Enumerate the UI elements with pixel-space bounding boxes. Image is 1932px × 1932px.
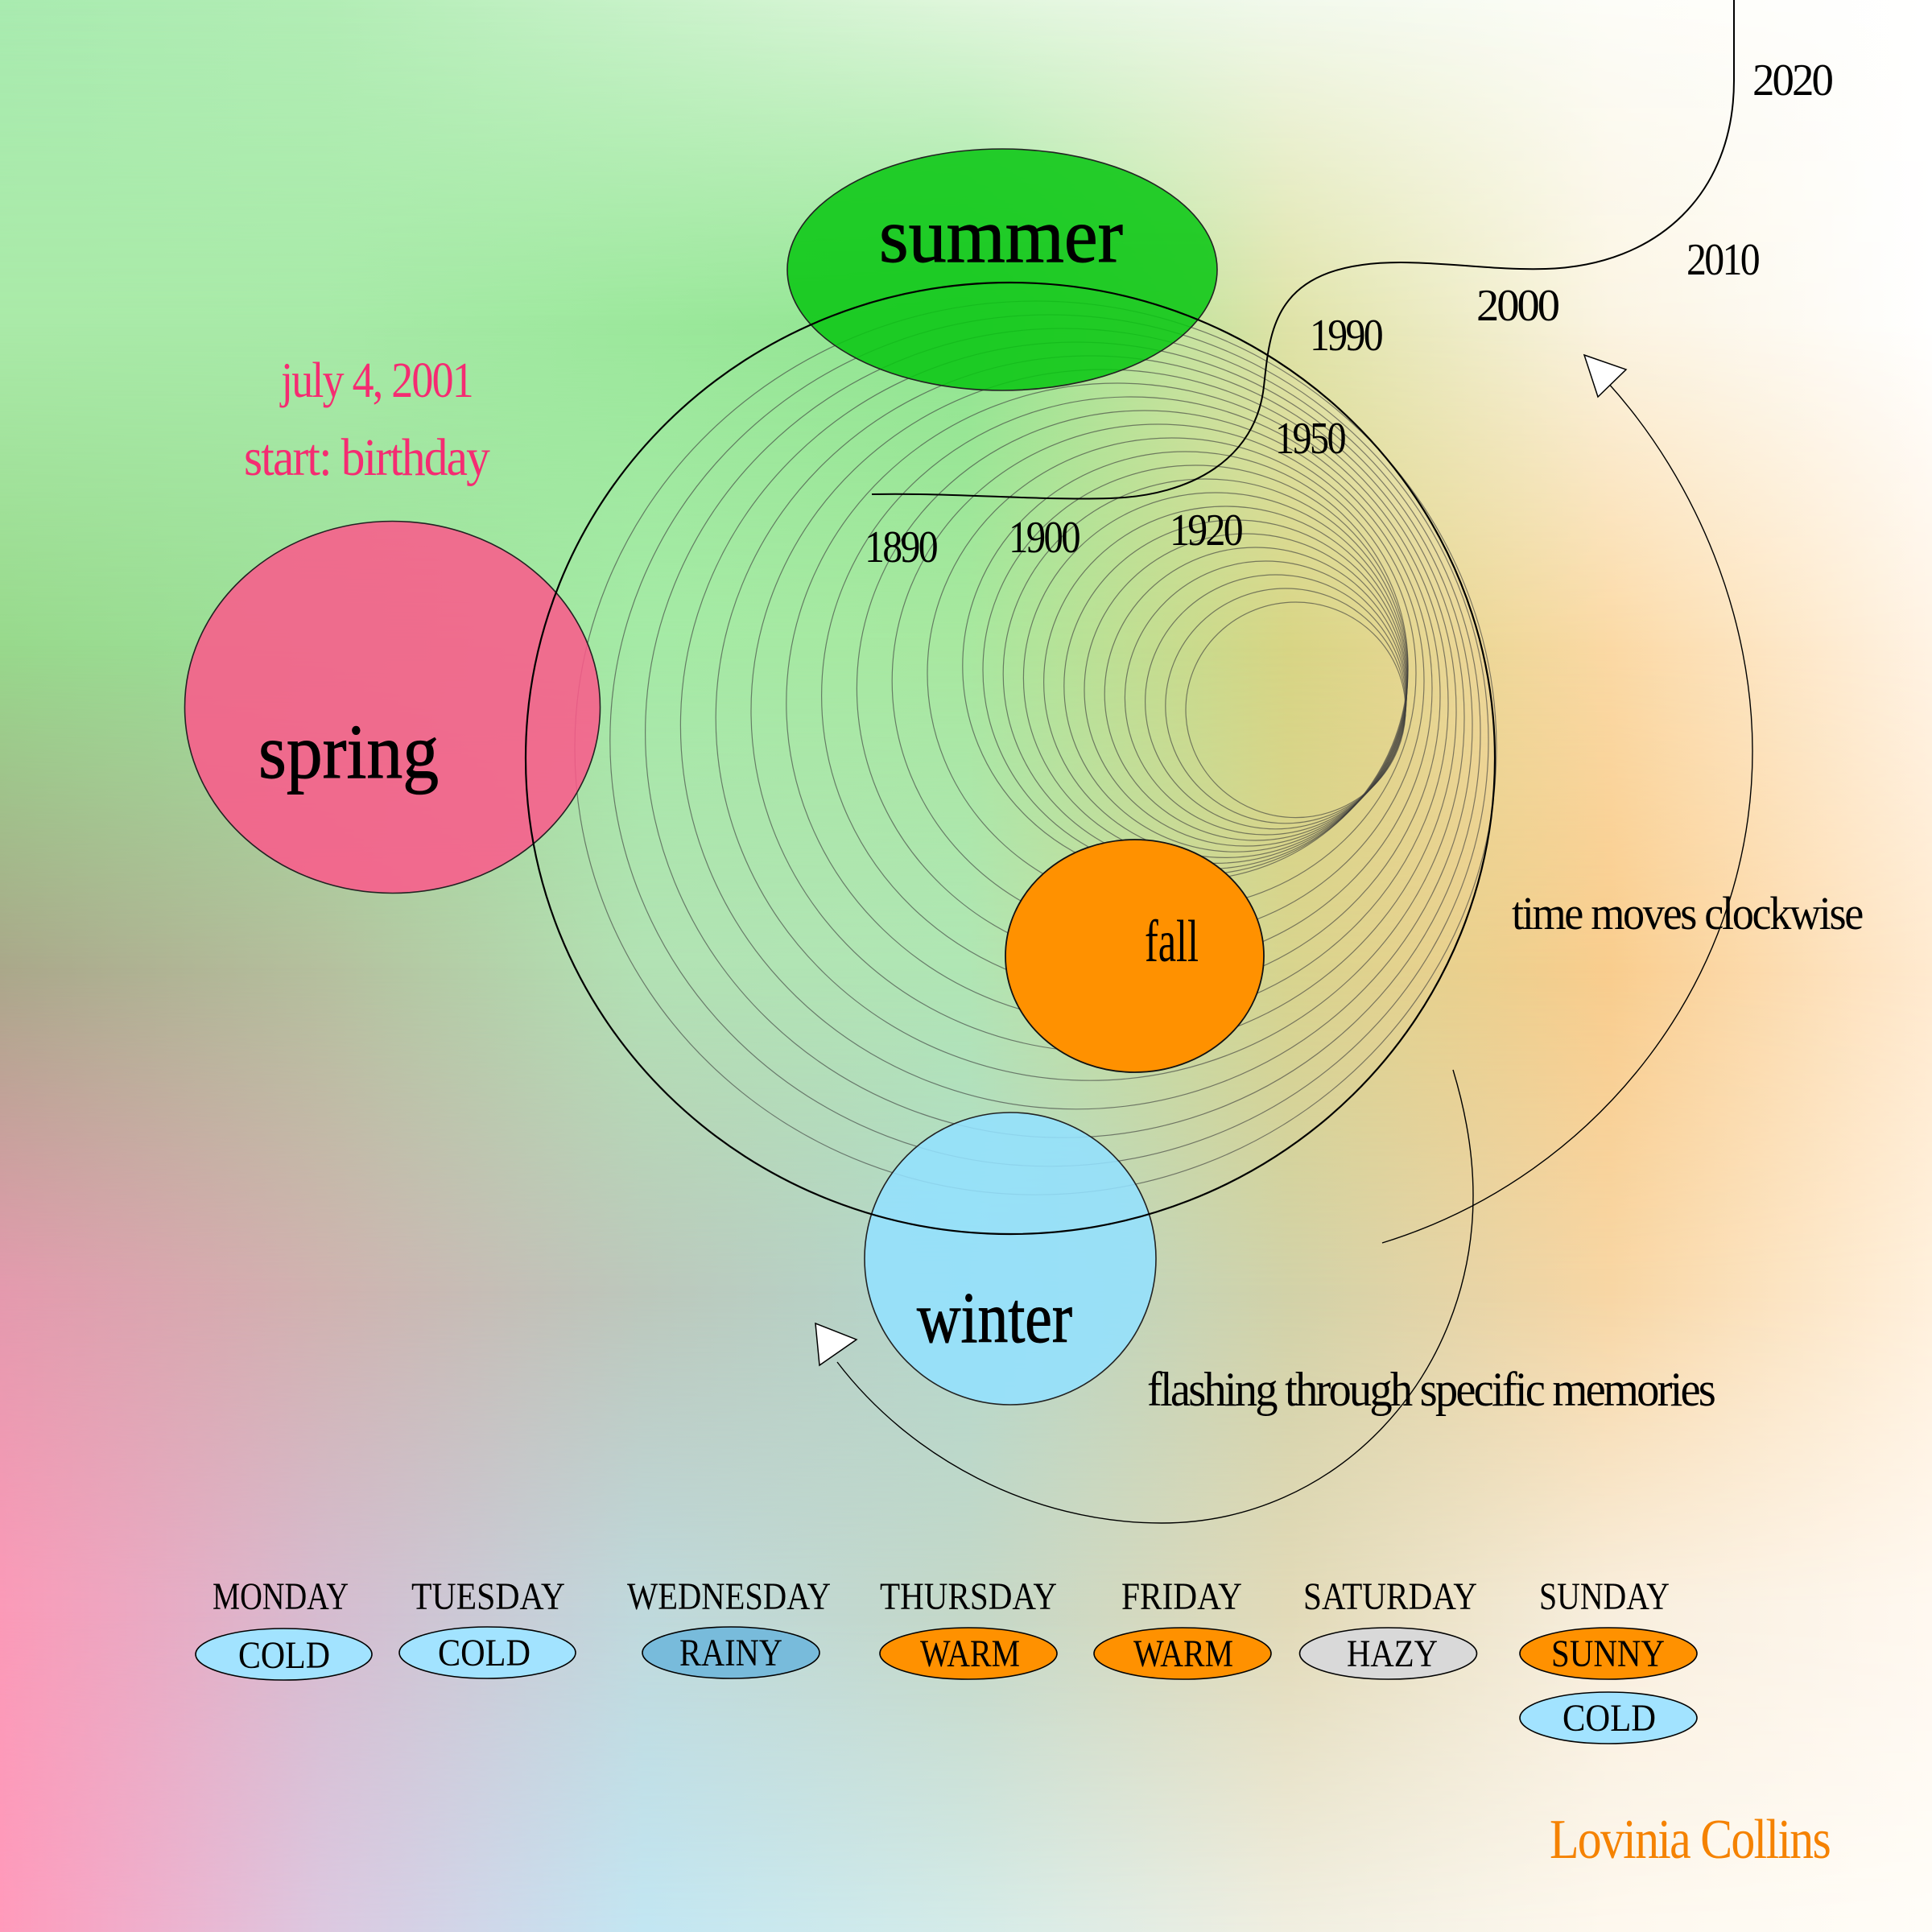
weekday headings: SUNDAY bbox=[1539, 1575, 1670, 1618]
year labels: 1990 bbox=[1310, 311, 1382, 361]
year labels bbox=[865, 56, 1832, 572]
year labels: 2010 bbox=[1686, 235, 1759, 285]
pill: Friday warm: WARM bbox=[1133, 1633, 1233, 1675]
weekday headings: WEDNESDAY bbox=[627, 1575, 831, 1618]
nested rings: years of life bbox=[575, 301, 1496, 1195]
season ellipse: summer bbox=[787, 149, 1217, 390]
year labels: 2000 bbox=[1476, 281, 1558, 331]
label: winter: winter bbox=[917, 1278, 1072, 1358]
label: summer: summer bbox=[879, 192, 1123, 279]
weekday headings bbox=[213, 1575, 1670, 1618]
pill: Friday warm bbox=[1094, 1628, 1271, 1679]
year labels: 1890 bbox=[865, 522, 937, 572]
year labels: 1900 bbox=[1009, 513, 1080, 563]
pill: Wednesday rainy: RAINY bbox=[679, 1632, 782, 1674]
pill: Wednesday rainy bbox=[642, 1627, 819, 1678]
pill: Tuesday cold: COLD bbox=[438, 1632, 530, 1674]
pill: Tuesday cold bbox=[399, 1627, 576, 1678]
pill: Monday cold: COLD bbox=[238, 1634, 330, 1677]
annotation: time moves clockwise: time moves clockwise bbox=[1512, 887, 1863, 939]
pill: Monday cold bbox=[196, 1629, 372, 1680]
arrow: time moves clockwise bbox=[1382, 355, 1752, 1243]
year labels: 2020 bbox=[1752, 56, 1832, 105]
year labels: 1950 bbox=[1275, 414, 1345, 464]
weekday headings: FRIDAY bbox=[1121, 1575, 1242, 1618]
label: fall: fall bbox=[1145, 909, 1199, 975]
timeline curve bbox=[872, 0, 1734, 499]
weekday headings: THURSDAY bbox=[880, 1575, 1057, 1618]
author signature: Lovinia Collins bbox=[1550, 1809, 1830, 1871]
annotation: flashing through specific memories: flashing through specific memories bbox=[1147, 1363, 1715, 1416]
start note: start: birthday bbox=[244, 428, 490, 487]
season ellipse: spring bbox=[185, 522, 601, 894]
weekday headings: MONDAY bbox=[213, 1575, 349, 1618]
pill: Sunday cold: COLD bbox=[1563, 1697, 1656, 1740]
weekday headings: SATURDAY bbox=[1303, 1575, 1477, 1618]
arrow: flashing through memories bbox=[815, 1070, 1473, 1523]
pill: Saturday hazy: HAZY bbox=[1347, 1633, 1438, 1675]
pill: Thursday warm bbox=[880, 1628, 1057, 1679]
label: spring: spring bbox=[258, 708, 439, 795]
pill: Sunday sunny: SUNNY bbox=[1551, 1633, 1665, 1675]
weekday headings: TUESDAY bbox=[411, 1575, 565, 1618]
pill: Sunday sunny bbox=[1520, 1628, 1697, 1679]
pill: Saturday hazy bbox=[1299, 1628, 1476, 1679]
season ellipse: fall bbox=[1005, 840, 1264, 1072]
outer year circle bbox=[526, 283, 1495, 1234]
pill: Thursday warm: WARM bbox=[920, 1633, 1020, 1675]
year labels: 1920 bbox=[1170, 506, 1242, 555]
pill: Sunday cold bbox=[1520, 1692, 1697, 1744]
date note: july 4, 2001 bbox=[279, 353, 473, 408]
season ellipse: winter bbox=[865, 1113, 1156, 1405]
